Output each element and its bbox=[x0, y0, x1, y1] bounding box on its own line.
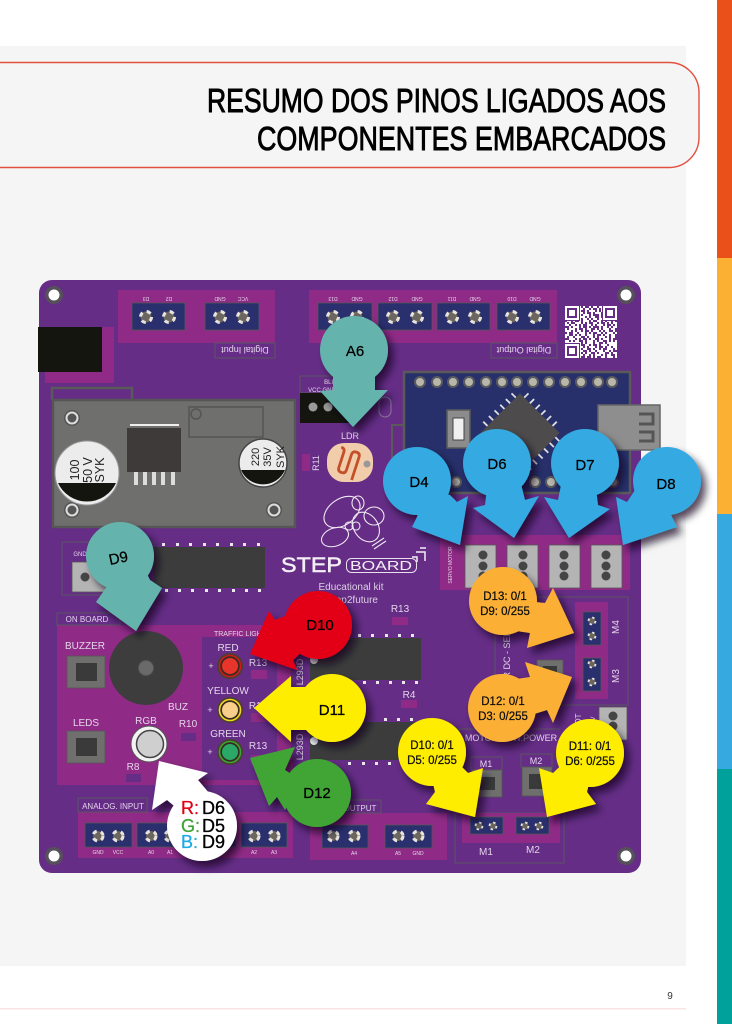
digital output terminals: D10 bbox=[507, 295, 517, 301]
callout: RGB pins bbox=[152, 761, 237, 861]
digital output terminals: D13 bbox=[328, 295, 338, 301]
M3 M4 motor block: DOT bbox=[574, 713, 583, 730]
LDR sensor bbox=[302, 431, 373, 482]
callout: D12 green: D12 bbox=[303, 785, 331, 802]
buzzer button: BUZZER bbox=[65, 641, 105, 652]
leds button: LEDS bbox=[73, 718, 99, 729]
output terminals: A4 bbox=[351, 851, 357, 857]
RGB pin labels bbox=[181, 798, 225, 852]
resistors bbox=[126, 719, 198, 782]
motor M1 M2 block: M1 bbox=[479, 847, 493, 858]
digital output terminals: GND bbox=[529, 295, 541, 301]
callout: A6 bbox=[320, 316, 388, 427]
RGB pin labels: R: bbox=[181, 798, 199, 818]
side colour bar bbox=[717, 0, 732, 1024]
traffic light bbox=[202, 631, 277, 780]
analog input terminals bbox=[78, 798, 293, 858]
L293D drivers: R4 bbox=[403, 690, 416, 701]
callout: D7: D7 bbox=[575, 457, 595, 474]
analog input terminals: A2 bbox=[251, 850, 257, 856]
analog input terminals: VCC bbox=[113, 850, 124, 856]
traffic light: + bbox=[208, 661, 214, 671]
M3 M4 motor block bbox=[495, 597, 628, 740]
callout: D10 D5 motor M1 bbox=[398, 718, 483, 817]
callout: D13 D9 motor M4: D9: 0/255 bbox=[480, 606, 530, 618]
callout: D4 bbox=[383, 447, 468, 545]
L293D drivers: L293D bbox=[295, 733, 305, 760]
buzzer button bbox=[65, 641, 105, 688]
callout: D4: D4 bbox=[409, 474, 429, 491]
digital output terminals: GND bbox=[351, 295, 363, 301]
output terminals: OUTPUT bbox=[344, 804, 377, 813]
traffic light: TRAFFIC LIGHT bbox=[214, 631, 267, 638]
header banner bbox=[0, 62, 699, 168]
traffic light: GREEN bbox=[210, 729, 246, 740]
callout: D11 D6 motor M2: D11: 0/1 bbox=[569, 741, 611, 753]
buzzer bbox=[109, 631, 188, 713]
analog input terminals: ANALOG. INPUT bbox=[82, 802, 144, 811]
L293D drivers bbox=[291, 604, 421, 765]
RGB pin labels: D5 bbox=[202, 816, 225, 836]
callout: D13 D9 motor M4: D13: 0/1 bbox=[483, 591, 527, 603]
callout: D9: D9 bbox=[107, 548, 130, 569]
callout: D8: D8 bbox=[656, 476, 676, 493]
motor M1 M2 block: MOTOR/LOW.POWER bbox=[465, 733, 558, 743]
digital input terminals: VCC bbox=[237, 295, 248, 301]
callout: D10 red bbox=[250, 591, 352, 670]
bluetooth connector: BLU bbox=[324, 380, 336, 386]
stepboard logo bbox=[281, 490, 426, 606]
voltage regulator module bbox=[52, 388, 295, 527]
analog input terminals: A3 bbox=[271, 850, 277, 856]
digital output terminals: GND bbox=[469, 295, 481, 301]
left IC and connector bbox=[62, 542, 265, 595]
motor M1 M2 block: M2 bbox=[526, 845, 540, 856]
L293D drivers: R13 bbox=[391, 604, 410, 615]
callout: D11 yellow: D11 bbox=[319, 702, 345, 719]
circuit board bbox=[38, 280, 660, 873]
board base bbox=[39, 280, 641, 873]
callout: D12 D3 motor M3: D12: 0/1 bbox=[481, 696, 525, 708]
callout: D10 D5 motor M1: D10: 0/1 bbox=[410, 740, 454, 752]
output terminals: GND bbox=[412, 851, 424, 857]
motor M1 M2 block bbox=[455, 729, 564, 863]
RGB pin labels: D6 bbox=[202, 798, 225, 818]
capacitor 220: 35V bbox=[262, 447, 274, 467]
RGB pin labels: B: bbox=[181, 832, 198, 852]
callout: D7 bbox=[544, 429, 619, 538]
callout: D12 D3 motor M3: D3: 0/255 bbox=[478, 711, 528, 723]
M3 M4 motor block: M4 bbox=[611, 620, 622, 634]
callout: D9 bbox=[86, 522, 162, 631]
RGB pin labels: G: bbox=[181, 816, 200, 836]
digital input terminals: D3 bbox=[143, 295, 149, 301]
digital input terminals: GND bbox=[214, 295, 226, 301]
analog input terminals: GND bbox=[92, 850, 104, 856]
M3 M4 motor block: R DC - SEL bbox=[502, 631, 512, 679]
M3 M4 motor block: M3 bbox=[611, 669, 622, 683]
callout: D12 D3 motor M3 bbox=[468, 662, 572, 742]
digital output terminals: Digital Output bbox=[496, 345, 551, 355]
traffic light: R12 bbox=[249, 701, 268, 712]
digital input terminals: Digital Input bbox=[221, 345, 269, 355]
mounting holes bbox=[45, 286, 635, 865]
capacitor 220: SYK bbox=[275, 445, 287, 468]
traffic light: + bbox=[207, 747, 213, 757]
digital input terminals: D2 bbox=[166, 295, 172, 301]
callout: D11 yellow bbox=[254, 674, 366, 742]
buzzer: BUZ bbox=[168, 702, 188, 713]
callout: D6 bbox=[463, 429, 539, 538]
servo motor connectors: SERVO MOTOR bbox=[448, 546, 454, 584]
M3 M4 motor block: +5V bbox=[591, 717, 597, 727]
callout: D11 D6 motor M2: D6: 0/255 bbox=[565, 756, 615, 768]
digital output terminals: D12 bbox=[388, 295, 398, 301]
capacitor 100: 100 bbox=[68, 460, 82, 480]
on board panel: ON BOARD bbox=[66, 615, 109, 624]
servo motor connectors bbox=[440, 535, 630, 590]
resistors: R10 bbox=[179, 719, 198, 730]
mascot bbox=[318, 490, 386, 550]
capacitor 220 bbox=[239, 439, 287, 487]
callout: A6: A6 bbox=[346, 343, 364, 360]
DC power jack bbox=[38, 327, 114, 383]
analog input terminals: A0 bbox=[148, 850, 154, 856]
analog input terminals: A1 bbox=[167, 850, 173, 856]
traffic light: RED bbox=[217, 643, 239, 654]
wordmark: BOARD bbox=[350, 558, 412, 573]
motor M1 M2 block: M2 bbox=[530, 756, 542, 766]
left IC and connector: GND bbox=[73, 552, 87, 558]
LDR sensor: LDR bbox=[341, 431, 359, 441]
digital output terminals: GND bbox=[411, 295, 423, 301]
on board panel bbox=[57, 613, 293, 785]
callout: D10 red: D10 bbox=[306, 617, 334, 634]
capacitor 100: 50 V bbox=[81, 456, 95, 483]
traffic light: YELLOW bbox=[207, 686, 249, 697]
callout: D8 bbox=[616, 447, 701, 545]
traffic light: R13 bbox=[249, 741, 268, 752]
motor M1 M2 block: M1 bbox=[480, 759, 492, 769]
QR code bbox=[565, 306, 617, 358]
resistors: R8 bbox=[127, 762, 140, 773]
title bbox=[207, 82, 666, 157]
footer line bbox=[0, 1008, 686, 1010]
stepboard logo: Educational kit bbox=[318, 582, 384, 593]
bluetooth connector bbox=[300, 376, 391, 423]
wordmark bbox=[281, 548, 426, 577]
RGB pin labels: D9 bbox=[202, 832, 225, 852]
page number: 9 bbox=[667, 991, 673, 1002]
capacitor 220: 220 bbox=[250, 448, 262, 466]
digital output terminals: D11 bbox=[447, 295, 456, 301]
output terminals bbox=[310, 800, 447, 860]
arduino nano bbox=[392, 372, 660, 493]
output terminals: A5 bbox=[395, 851, 401, 857]
traffic light: R13 bbox=[249, 658, 268, 669]
capacitor 100 bbox=[55, 441, 119, 505]
callout: D13 D9 motor M4 bbox=[469, 567, 574, 648]
callout: D11 D6 motor M2 bbox=[539, 719, 624, 817]
wordmark: STEP bbox=[281, 554, 342, 577]
L293D drivers: L293D bbox=[295, 658, 305, 685]
bluetooth connector: VCC GND bbox=[308, 388, 336, 394]
callout: D12 green bbox=[250, 747, 351, 827]
leds button bbox=[67, 718, 105, 763]
stepboard logo: step2future bbox=[328, 595, 378, 606]
RGB LED: RGB bbox=[135, 716, 157, 727]
RGB LED bbox=[131, 716, 167, 762]
traffic light: + bbox=[207, 705, 213, 715]
LDR sensor: R11 bbox=[311, 455, 321, 471]
capacitor 100: SYK bbox=[93, 457, 107, 483]
callout: D10 D5 motor M1: D5: 0/255 bbox=[407, 755, 457, 767]
digital output terminals bbox=[309, 290, 557, 358]
callout: D6: D6 bbox=[487, 456, 507, 473]
digital input terminals bbox=[118, 290, 275, 358]
